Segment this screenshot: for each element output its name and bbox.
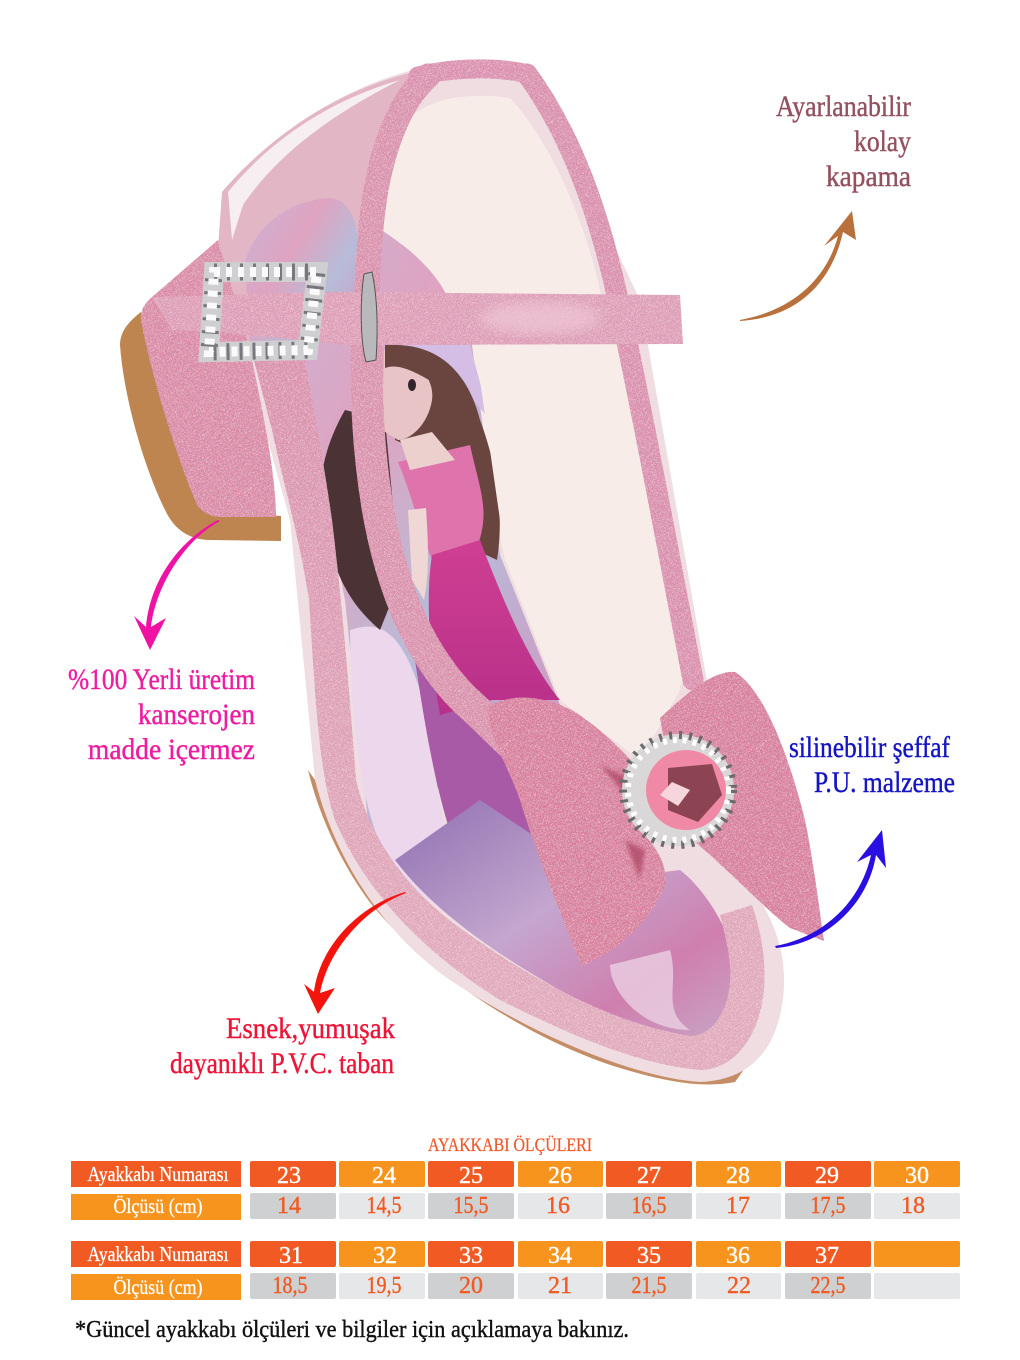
callout: local production: %100 Yerli üretim [68, 663, 255, 696]
iridescent insole back [245, 198, 360, 380]
callout: local production: madde içermez [88, 733, 255, 766]
glitter parts [141, 69, 824, 1070]
shoe photo illustration [120, 68, 824, 1084]
left collar strip top [366, 76, 428, 350]
arrow: closure [740, 211, 856, 321]
callout: local production [68, 663, 255, 766]
arrow: heel to local production text [134, 520, 220, 650]
size header cells row 2: 36 [726, 1243, 750, 1269]
gown pale lower section [350, 627, 480, 930]
measurement cells row 1: 15,5 [454, 1193, 488, 1219]
left collar strip lower [367, 345, 530, 760]
measurement cells row 1: 14 [277, 1193, 301, 1219]
insole behind strap [262, 228, 560, 840]
size chart [71, 1135, 960, 1300]
size header cells row 1: 26 [548, 1163, 572, 1189]
rhinestone buckle [209, 272, 317, 352]
row labels: Ayakkabı Numarası [88, 1242, 229, 1266]
hair left [321, 410, 400, 630]
measurement cells row 2: 18,5 [272, 1273, 308, 1299]
measurement cells row 1: 16 [546, 1193, 570, 1219]
size header cells row 2: 35 [637, 1243, 661, 1269]
callout: transparent material: silinebilir şeffaf [789, 731, 950, 764]
measurement cells row 2: 22 [727, 1273, 751, 1299]
toe insole highlights [610, 950, 690, 1030]
shoe outsole [120, 312, 745, 1084]
clear highlight on back of upper [228, 80, 400, 240]
footnote: *Güncel ayakkabı ölçüleri ve bilgiler için açıklamaya bakınız. [75, 1317, 629, 1343]
skirt [429, 540, 560, 715]
insole lilac sky [380, 345, 490, 420]
row labels [71, 1161, 241, 1300]
size header cells row 2 [250, 1241, 960, 1269]
size header cells row 2: 37 [815, 1243, 839, 1269]
top collar band [418, 69, 528, 76]
heel cup tinted upper [215, 70, 422, 350]
size header cells row 2: 33 [459, 1243, 483, 1269]
bow right lobe [660, 672, 824, 941]
face [382, 350, 432, 440]
bow shadow folds [600, 765, 645, 880]
row labels: Ölçüsü (cm) [114, 1275, 203, 1299]
fringe [385, 345, 438, 385]
callout: adjustable closure [776, 90, 911, 193]
measurement cells row 1 [250, 1193, 960, 1219]
callout: flexible sole [170, 1012, 395, 1080]
strap keeper loop [361, 272, 377, 362]
heel block [141, 240, 276, 517]
measurement cells row 2 [250, 1273, 960, 1299]
size header cells row 2: 31 [279, 1243, 303, 1269]
measurement cells row 2: 21,5 [632, 1273, 666, 1299]
eye [408, 379, 416, 391]
shoe clear body silhouette [222, 68, 784, 1082]
callout: flexible sole: Esnek,yumuşak [226, 1012, 395, 1045]
measurement cells row 1: 16,5 [632, 1193, 666, 1219]
measurement cells row 1: 14,5 [366, 1193, 402, 1219]
measurement cells row 2: 21 [548, 1273, 572, 1299]
measurement cells row 1: 17,5 [810, 1193, 846, 1219]
ankle strap [152, 292, 683, 345]
callout: adjustable closure: kolay [854, 125, 911, 158]
strap pale highlight [480, 302, 600, 334]
hollow front overlay [475, 345, 684, 748]
size header cells row 1: 23 [277, 1163, 301, 1189]
bodice [398, 445, 483, 560]
toe insole print [395, 800, 736, 1039]
arrow: material [775, 830, 886, 948]
size header cells row 1 [250, 1161, 960, 1189]
callout: flexible sole: dayanıklı P.V.C. taban [170, 1047, 394, 1080]
size header cells row 2: 34 [548, 1243, 572, 1269]
chart title: AYAKKABI ÖLÇÜLERI [428, 1135, 592, 1156]
girl illustration [321, 345, 560, 715]
measurement cells row 1: 17 [726, 1193, 750, 1219]
bow jewel [622, 734, 734, 846]
row labels: Ölçüsü (cm) [114, 1194, 203, 1218]
right collar strip [527, 74, 693, 680]
size header cells row 1: 25 [459, 1163, 483, 1189]
size header cells row 1: 30 [905, 1163, 929, 1189]
size header cells row 1: 27 [637, 1163, 661, 1189]
outer sole rim [250, 345, 764, 1070]
callout: adjustable closure: kapama [826, 160, 911, 193]
size header cells row 1: 24 [372, 1163, 396, 1189]
measurement cells row 1: 18 [901, 1193, 925, 1219]
callout: transparent material: P.U. malzeme [814, 766, 955, 799]
hair right [395, 345, 500, 560]
size header cells row 2: 32 [373, 1243, 397, 1269]
skirt lower pink [415, 660, 580, 930]
row labels: Ayakkabı Numarası [88, 1162, 229, 1186]
bow left lobe [487, 697, 666, 966]
callout: transparent material [789, 731, 955, 799]
clear shoe opening [376, 96, 680, 760]
measurement cells row 2: 19,5 [366, 1273, 402, 1299]
arm [408, 508, 428, 600]
neck and shoulders [400, 432, 455, 470]
callout: local production: kanserojen [138, 698, 255, 731]
measurement cells row 2: 20 [459, 1273, 483, 1299]
measurement cells row 2: 22,5 [810, 1273, 846, 1299]
size header cells row 1: 29 [815, 1163, 839, 1189]
size header cells row 1: 28 [726, 1163, 750, 1189]
arrow: sole [304, 892, 406, 1014]
callout: adjustable closure: Ayarlanabilir [776, 90, 911, 123]
